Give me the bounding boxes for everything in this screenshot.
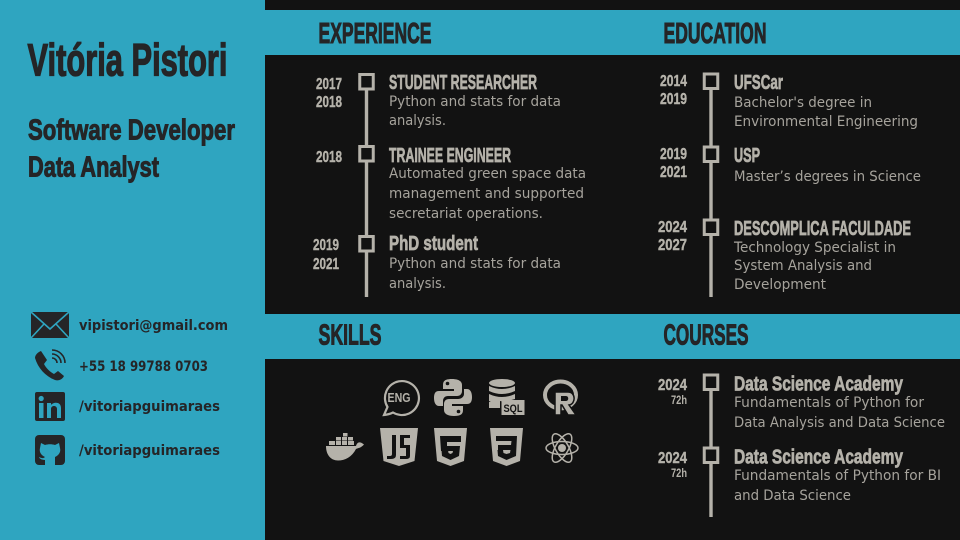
heading: courses: COURSES [664,320,748,352]
entry: ufscar: UFSCar [734,72,783,94]
panel: courses timeline [658,374,945,517]
entry: ufscar: Bachelor's degree in [734,95,872,111]
entry: python for data analysis: Data Science Academy [734,374,904,396]
role subtitle: Data Analyst [28,152,159,184]
entry: ufscar [660,72,918,130]
entry: python for bi [658,446,941,504]
entry: ufscar: 2019 [660,91,687,108]
contact list [31,312,228,465]
entry: usp: Master’s degrees in Science [734,169,921,185]
entry: python for data analysis: 72h [671,395,687,407]
entry: descomplica faculdade: 2024 [658,219,687,236]
icon: sql database: SQL [504,403,523,415]
entry: ufscar: 2014 [660,73,687,90]
entry: trainee engineer [316,145,586,222]
panel: experience timeline [313,72,586,297]
entry: descomplica faculdade: Technology Specialist in [733,240,896,256]
icon: javascript [380,428,418,466]
entry: ufscar: Environmental Engineering [734,114,918,130]
entry: python for bi: and Data Science [734,488,851,504]
role subtitle [28,114,235,184]
band: experience and education header [265,10,960,55]
icon: english [384,381,419,415]
entry: python for data analysis [658,374,945,431]
heading: education: EDUCATION [664,18,766,50]
panel: skills icons [326,379,578,466]
icon: docker [326,433,364,460]
entry: student researcher: analysis. [389,113,446,129]
icon: envelope [31,312,69,338]
entry: python for bi: 2024 [658,450,687,467]
entry: descomplica faculdade: System Analysis and [734,258,872,274]
entry: descomplica faculdade: 2027 [658,237,687,254]
entry: student researcher: 2017 [316,76,342,93]
entry: python for data analysis: Fundamentals of Python for [734,395,924,411]
entry: phd student: 2019 [313,237,339,254]
entry: python for bi: 72h [671,468,687,480]
panel: education timeline [658,72,921,297]
contact: linkedin: /vitoriapguimaraes [79,399,220,415]
entry: student researcher: STUDENT RESEARCHER [389,72,537,94]
entry: python for data analysis: Data Analysis and Data Science [734,415,945,431]
entry: trainee engineer: 2018 [316,149,342,166]
entry: usp: 2021 [660,164,687,181]
entry: student researcher [316,72,561,129]
contact: phone: +55 18 99788 0703 [79,359,208,375]
name title: Vitória Pistori [28,34,228,86]
heading: experience: EXPERIENCE [318,18,432,50]
entry: python for bi: Fundamentals of Python for BI [734,468,941,484]
icon: github [35,435,65,465]
entry: descomplica faculdade: Development [734,277,826,293]
icon: english: ENG [388,390,410,405]
icon: r language [545,382,576,415]
entry: phd student: 2021 [313,256,339,273]
icon: phone [35,350,65,380]
icon: sql database [489,379,524,415]
entry: trainee engineer: TRAINEE ENGINEER [389,145,511,167]
entry: student researcher: Python and stats for data [389,94,561,110]
contact: github: /vitoriapguimaraes [79,443,220,459]
entry: phd student [313,233,561,292]
entry: trainee engineer: secretariat operations. [389,206,543,222]
panel: left sidebar [0,0,265,540]
entry: phd student: Python and stats for data [389,256,561,272]
entry: python for bi: Data Science Academy [734,446,904,468]
entry: trainee engineer: Automated green space data [389,166,586,182]
icon: linkedin [35,392,65,421]
entry: usp [660,145,921,185]
icon: react [546,431,578,465]
entry: usp: 2019 [660,146,687,163]
entry: phd student: analysis. [389,276,446,292]
entry: usp: USP [734,145,760,167]
entry: phd student: PhD student [389,233,478,255]
entry: python for data analysis: 2024 [658,377,687,394]
role subtitle: Software Developer [28,114,235,146]
entry: trainee engineer: management and supported [389,186,584,202]
entry: student researcher: 2018 [316,94,342,111]
contact: email: vipistori@gmail.com [79,318,228,334]
icon: css3 [490,428,523,466]
icon: html5 [434,428,467,466]
icon: python [434,379,472,416]
heading: skills: SKILLS [318,320,382,352]
band: skills and courses header [265,314,960,359]
entry: descomplica faculdade [658,218,911,293]
